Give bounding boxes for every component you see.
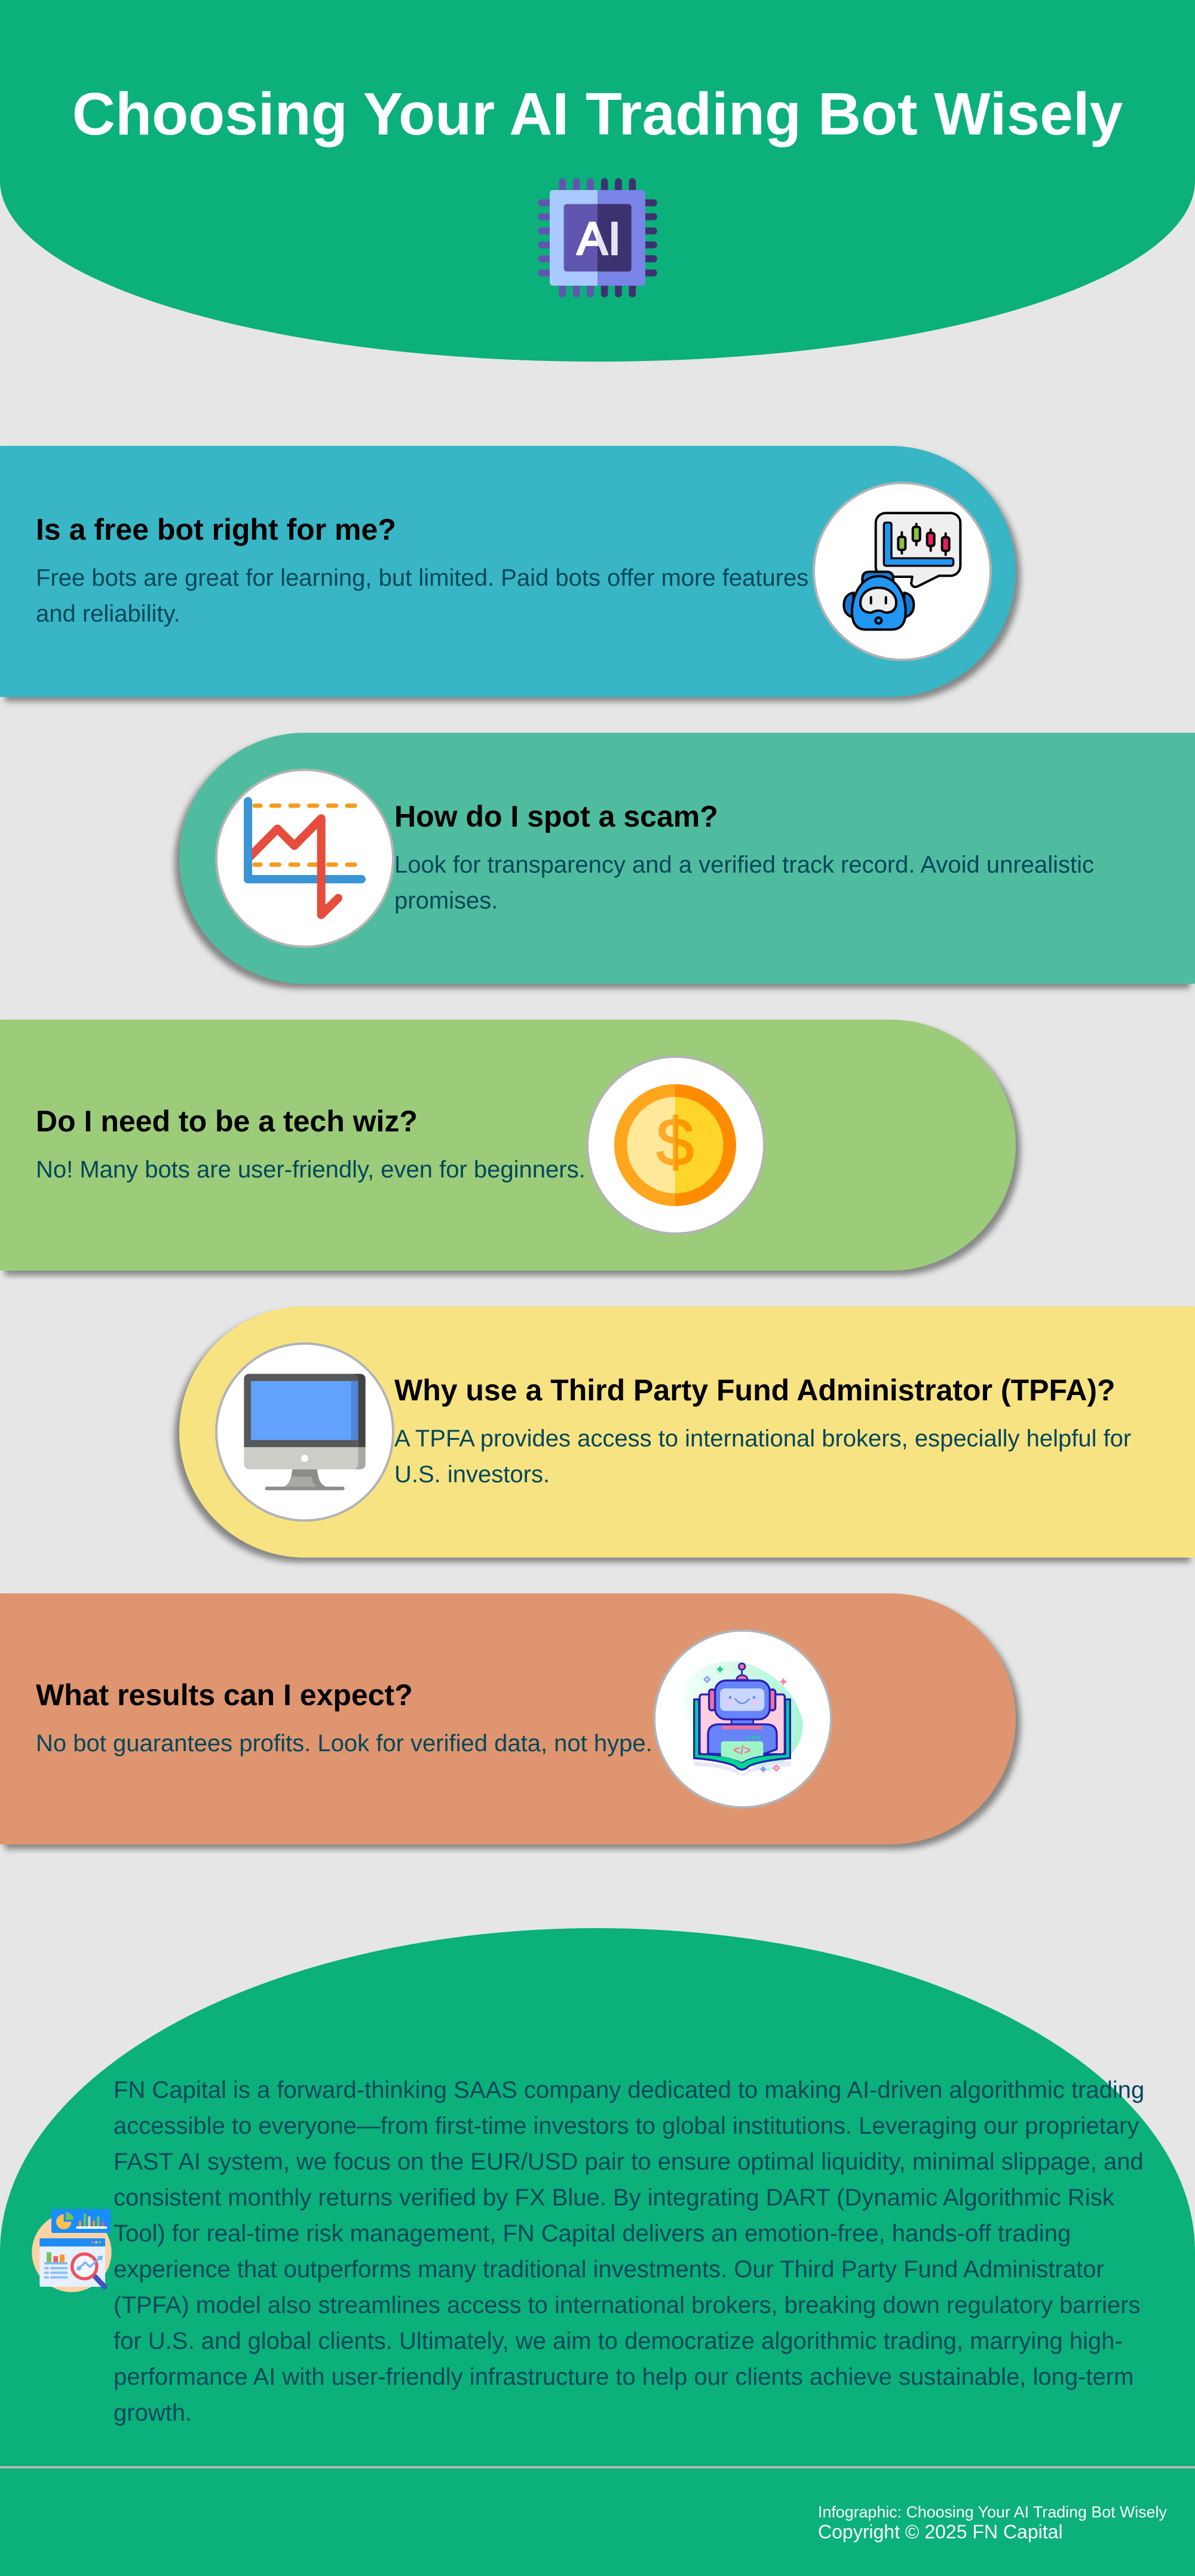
- text block: company description: performance AI with user-friendly infrastructure to help our clients achieve sustainable, long-term: [114, 2364, 1133, 2390]
- icon: analytics dashboard: [32, 2209, 112, 2292]
- icon circle: [653, 1629, 832, 1809]
- text block: [394, 1425, 1131, 1488]
- header banner: [0, 0, 1195, 362]
- text block: company description: FAST AI system, we focus on the EUR/USD pair to ensure optimal liquidity, minimal slippage, and: [114, 2149, 1144, 2175]
- icon: robot on open book: [684, 1662, 803, 1776]
- icon: gold coin: $: [656, 1105, 694, 1180]
- footer divider: [0, 2466, 1195, 2468]
- icon: falling line chart: [244, 797, 366, 919]
- text block: No bot guarantees profits. Look for verified data, not hype.: [36, 1730, 652, 1757]
- icon circle: [215, 1342, 394, 1522]
- icon: AI chip: AI: [577, 214, 621, 265]
- icon: robot with candlestick chart: [842, 512, 962, 631]
- title: Choosing Your AI Trading Bot Wisely: [72, 81, 1123, 148]
- panel: what results can I expect: [0, 1593, 1016, 1844]
- text block: A TPFA provides access to international brokers, especially helpful for: [394, 1425, 1131, 1452]
- text block: Look for transparency and a verified track record. Avoid unrealistic: [394, 852, 1094, 878]
- panel: do I need to be a tech wiz: [0, 1020, 1016, 1271]
- text block: [394, 852, 1094, 914]
- panel: how do I spot a scam: [179, 733, 1195, 984]
- icon: desktop monitor: [244, 1373, 366, 1491]
- icon circle: [813, 482, 992, 661]
- text block: company description: FN Capital is a forward-thinking SAAS company dedicated to making AI-driven algorithmic trading: [114, 2077, 1144, 2103]
- text block: company description: growth.: [114, 2400, 192, 2426]
- footer text: Infographic: Choosing Your AI Trading Bot Wisely: [818, 2503, 1167, 2521]
- panel: is a free bot right for me: [0, 446, 1016, 697]
- heading: Do I need to be a tech wiz?: [36, 1105, 418, 1138]
- panel: about FN Capital: [0, 1928, 1195, 2576]
- icon circle: [586, 1056, 765, 1235]
- icon: AI chip: [538, 178, 657, 298]
- text block: company description: experience that outperforms many traditional investments. Our Third Party Fund Administrator: [114, 2256, 1104, 2283]
- footer text: Copyright © 2025 FN Capital: [818, 2521, 1063, 2543]
- icon: gold coin: [614, 1084, 736, 1206]
- text block: No! Many bots are user-friendly, even for beginners.: [36, 1157, 586, 1183]
- text block: company description: accessible to everyone—from first-time investors to global institutions. Leveraging our proprietary: [114, 2113, 1139, 2139]
- heading: What results can I expect?: [36, 1678, 413, 1712]
- text block: company description: (TPFA) model also streamlines access to international brokers, breaking down regulatory barriers: [114, 2292, 1141, 2318]
- text block: [36, 565, 808, 627]
- text block: and reliability.: [36, 601, 180, 627]
- text block: U.S. investors.: [394, 1461, 550, 1488]
- text block: company description: consistent monthly returns verified by FX Blue. By integrating DART (Dynamic Algorithmic Risk: [114, 2185, 1114, 2211]
- heading: How do I spot a scam?: [394, 800, 718, 833]
- icon: robot on open book: </>: [733, 1743, 751, 1757]
- text block: company description: [114, 2077, 1144, 2426]
- panel: why use a third party fund administrator: [179, 1307, 1195, 1558]
- heading: Is a free bot right for me?: [36, 513, 396, 546]
- icon circle: [215, 769, 394, 948]
- text block: Free bots are great for learning, but limited. Paid bots offer more features: [36, 565, 808, 591]
- heading: Why use a Third Party Fund Administrator (TPFA)?: [394, 1373, 1116, 1407]
- text block: promises.: [394, 888, 498, 914]
- text block: company description: Tool) for real-time risk management, FN Capital delivers an emotion-free, hands-off trading: [114, 2220, 1071, 2247]
- text block: company description: for U.S. and global clients. Ultimately, we aim to democratize algorithmic trading, marrying high-: [114, 2328, 1123, 2354]
- footer text: [818, 2503, 1167, 2543]
